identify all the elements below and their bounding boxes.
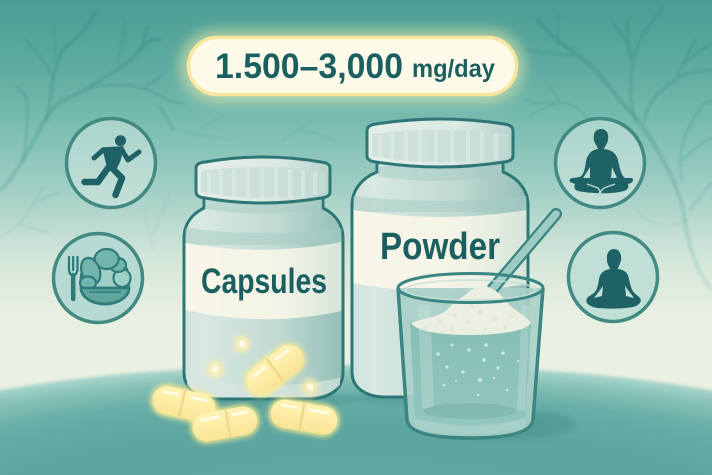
glass side highlights [418, 305, 530, 410]
floor [0, 365, 712, 475]
bare tree branches, left [0, 12, 340, 250]
capsule in bottle [241, 340, 309, 400]
bottle shading bands [186, 200, 342, 245]
water [410, 322, 531, 425]
bottle label [354, 210, 526, 292]
bottle shading bands [354, 166, 526, 212]
icon: running figure [66, 118, 156, 208]
glass outline [398, 288, 543, 438]
dosage amount text: 1.500–3,000 [215, 46, 403, 86]
capsules bottle [177, 157, 353, 408]
glass back [398, 288, 543, 438]
capsule on floor, right [269, 397, 339, 437]
capsules label text: Capsules [201, 262, 327, 301]
powder label text: Powder [380, 226, 500, 268]
powder texture [423, 304, 512, 331]
bottle shadow [348, 391, 532, 405]
dosage unit text: mg/day [412, 55, 495, 83]
icon: meditating figure, lower [568, 232, 658, 322]
glass base [424, 403, 516, 419]
dissolving specks [436, 343, 519, 396]
bottle cap [196, 157, 330, 203]
powder bottle [348, 119, 532, 405]
spoon [490, 214, 556, 292]
capsules on floor and in bottle [150, 340, 339, 443]
bottle body [352, 160, 528, 397]
bottle cap [367, 119, 513, 167]
capsule on floor, left [150, 384, 218, 424]
sparkles [206, 335, 319, 396]
dosage pill callout [180, 30, 524, 102]
glass of water with powder and spoon [398, 214, 576, 439]
powder mound [411, 286, 531, 335]
bottle label [186, 242, 342, 319]
bare tree branches, right [525, 8, 712, 290]
icon: salad bowl with fork [54, 234, 142, 322]
icon: meditating figure, upper [556, 118, 644, 208]
bottle body [184, 195, 343, 399]
bottle shadow [177, 392, 353, 408]
glass shadow [444, 409, 576, 439]
capsule on floor, centre [191, 405, 259, 443]
